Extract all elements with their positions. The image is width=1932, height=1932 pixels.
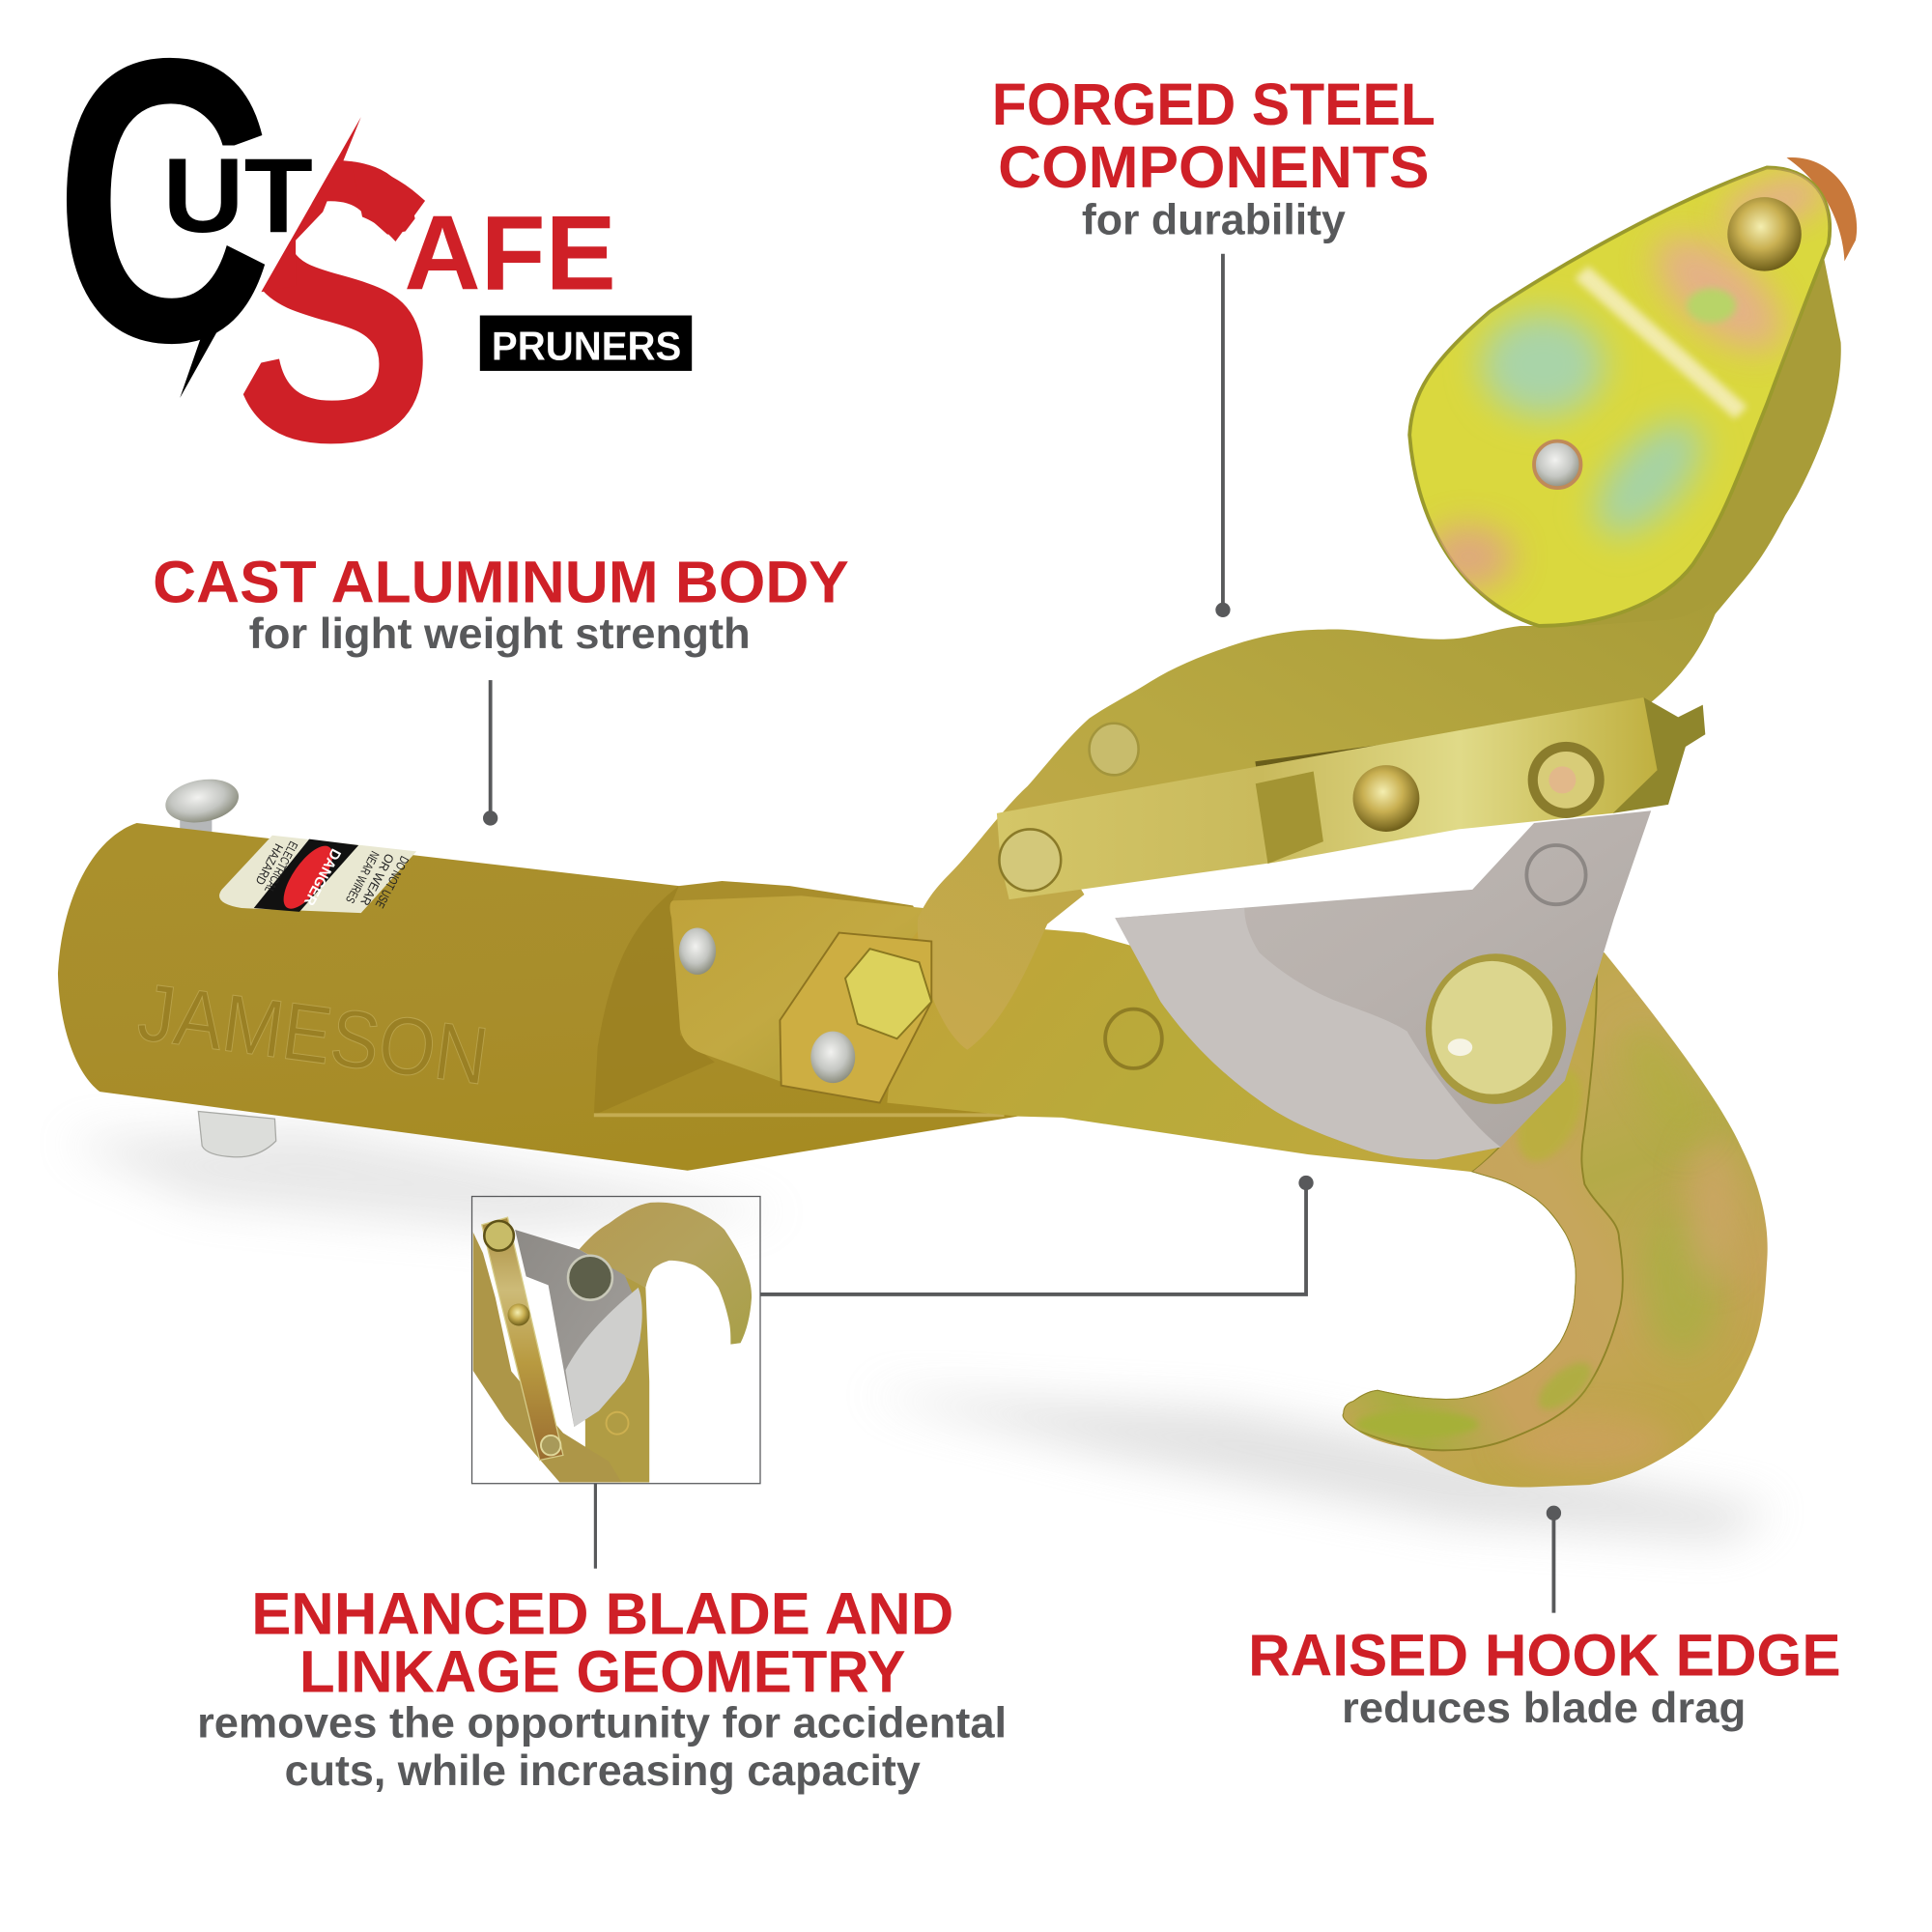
body shelf highlight xyxy=(594,1114,1005,1117)
bracket plate xyxy=(780,933,931,1103)
jaw logo xyxy=(1105,1009,1162,1068)
orange cap xyxy=(1786,157,1857,261)
logo knockout behind UT xyxy=(162,146,237,237)
subtext: cuts, while increasing capacity xyxy=(285,1747,921,1795)
link dark patch xyxy=(1256,771,1323,864)
leader xyxy=(483,680,497,826)
inset left stem xyxy=(473,1232,585,1482)
leader xyxy=(1215,254,1231,617)
subtext: removes the opportunity for accidental xyxy=(197,1699,1007,1747)
inset frame xyxy=(472,1197,760,1484)
blade logo xyxy=(1526,845,1586,904)
inset link end rivet xyxy=(541,1435,560,1455)
plate screw xyxy=(679,927,716,975)
subtext: for durability xyxy=(1082,196,1346,243)
back of cam plate xyxy=(1552,172,1841,663)
top screw xyxy=(162,774,242,844)
lever arm xyxy=(918,589,1723,1050)
heading xyxy=(992,71,1435,200)
upper rivet xyxy=(1727,197,1802,271)
subtext: for light weight strength xyxy=(249,611,751,658)
colour patches xyxy=(1481,313,1605,416)
logo S slash tip xyxy=(261,117,361,292)
callout: enhanced blade xyxy=(197,1484,1007,1795)
heading: RAISED HOOK EDGE xyxy=(1248,1623,1841,1689)
heading: LINKAGE GEOMETRY xyxy=(299,1638,905,1704)
hook patches xyxy=(1640,1205,1723,1358)
hex bolt xyxy=(845,949,931,1038)
warning sticker: DO NOT USE xyxy=(373,854,412,911)
subtext: reduces blade drag xyxy=(1342,1685,1746,1732)
logo C lightning tail xyxy=(180,251,254,398)
linkage teeth xyxy=(1256,739,1440,764)
dome rivet xyxy=(1353,765,1419,832)
lever rivet xyxy=(1090,724,1139,775)
inset lower jaw xyxy=(579,1249,649,1484)
logo S upper terminal xyxy=(352,161,425,242)
inset: blade detail xyxy=(472,1197,760,1484)
blade bevel xyxy=(1115,908,1501,1159)
cast aluminum body xyxy=(58,823,1018,1171)
socket plate xyxy=(670,895,936,1084)
logo letters UT: UT xyxy=(162,137,313,255)
inset blade polished edge xyxy=(565,1288,642,1427)
leader xyxy=(594,1484,597,1569)
raised hook lip xyxy=(1343,974,1623,1450)
heading xyxy=(251,1580,953,1704)
embossed brand: JAMESON xyxy=(133,966,494,1102)
callout: forged steel xyxy=(992,71,1435,617)
end screw xyxy=(999,829,1061,891)
inset link bar xyxy=(482,1217,563,1460)
ground shadows xyxy=(62,1127,1775,1540)
callout: cast aluminum body xyxy=(153,550,849,826)
blade xyxy=(1115,810,1651,1159)
heading: ENHANCED BLADE AND xyxy=(251,1580,953,1646)
logo: CutSafe Pruners xyxy=(54,0,692,525)
heading: FORGED STEEL xyxy=(992,71,1435,137)
logo pruners badge: PRUNERS xyxy=(492,323,681,368)
inset nut xyxy=(484,1221,514,1251)
hook xyxy=(1343,952,1768,1488)
warning sticker xyxy=(219,836,416,916)
logo letters AFE: AFE xyxy=(404,195,616,313)
fixed jaw xyxy=(887,918,1605,1172)
warning sticker: DANGER xyxy=(300,846,344,908)
cam plate xyxy=(1409,163,1834,626)
lip stem olive xyxy=(1516,1070,1582,1163)
leader xyxy=(1547,1506,1561,1613)
heading: CAST ALUMINUM BODY xyxy=(153,550,849,615)
hook tip green xyxy=(1355,1410,1479,1438)
bottom nut xyxy=(198,1112,276,1157)
warning sticker: NEAR WIRES xyxy=(343,849,383,906)
inset pivot xyxy=(568,1256,612,1300)
warning sticker: HAZARD xyxy=(253,841,286,888)
heading: COMPONENTS xyxy=(998,134,1430,200)
inset hook xyxy=(579,1203,752,1345)
logo S terminal knockout xyxy=(362,207,429,249)
pivot pin xyxy=(1426,953,1566,1104)
logo S lower terminal cut xyxy=(228,356,265,402)
body socket shading xyxy=(594,886,715,1115)
pruner illustration xyxy=(58,157,1857,1488)
end nut xyxy=(1528,742,1605,818)
hook lip green xyxy=(1537,1361,1593,1411)
inset dome rivet xyxy=(508,1303,529,1325)
logo knockout left of slash xyxy=(148,117,361,292)
end hex and bolt tip xyxy=(1613,697,1705,813)
inset jaw logo xyxy=(607,1412,629,1435)
connector: inset to blade xyxy=(760,1176,1314,1294)
link bar xyxy=(997,697,1705,899)
callout: raised hook edge xyxy=(1248,1506,1841,1732)
lower screw xyxy=(810,1032,855,1083)
lower rivet xyxy=(1534,441,1580,488)
warning sticker: OR WEAR xyxy=(357,851,397,908)
logo letter S: S xyxy=(227,77,435,525)
inset blade xyxy=(515,1230,642,1427)
subtext xyxy=(197,1699,1007,1795)
fold highlight xyxy=(1575,267,1747,419)
warning sticker: ELECTRICAL xyxy=(262,838,301,895)
